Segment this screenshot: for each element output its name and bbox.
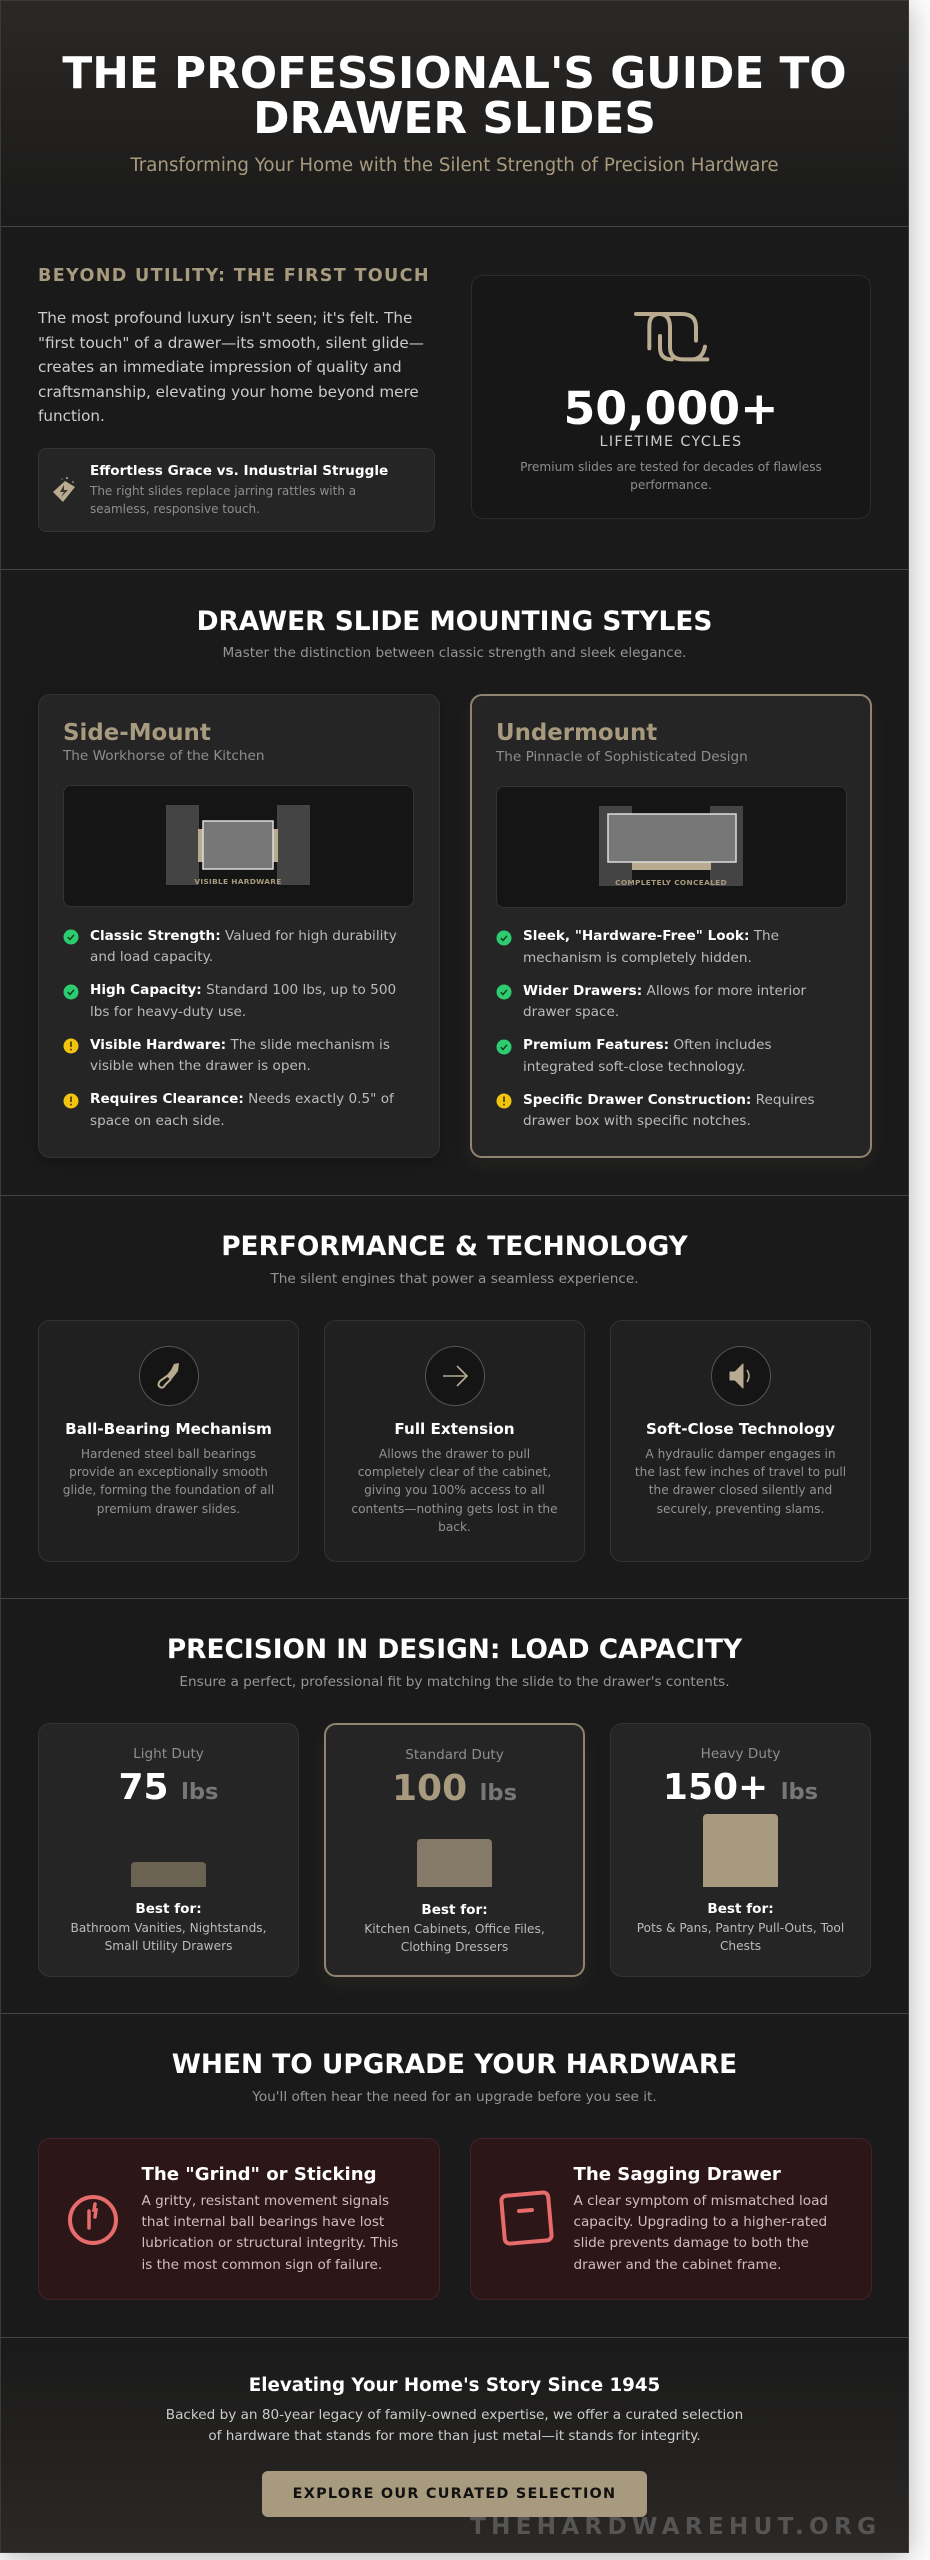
capacity bar [417,1839,492,1887]
subheading: Ensure a perfect, professional fit by matching the slide to the drawer's contents. [179,1674,730,1690]
list item: specific construction: drawer box with specific notches. [523,1113,751,1129]
body text: The most profound luxury isn't seen; it's felt. The [38,309,412,327]
card: soft close [610,1320,871,1562]
card text: giving you 100% access to all [364,1483,545,1497]
list item: wider drawers: Wider Drawers: Allows for more interior [523,982,806,998]
stat description [520,460,822,492]
callout text: The right slides replace jarring rattles with a [90,484,356,498]
panel: beyond utility [0,227,909,570]
card: light duty [38,1723,299,1977]
alert text: slide prevents damage to both the [574,2235,809,2251]
card title: Undermount [496,720,657,746]
best for label: Best for: [135,1901,202,1917]
list item: high capacity: High Capacity: Standard 100 lbs, up to 500 [90,982,396,998]
list item: specific construction: Specific Drawer Construction: Requires [523,1092,815,1108]
diagram: undermount: COMPLETELY CONCEALED [615,878,727,887]
card subtitle: The Pinnacle of Sophisticated Design [496,749,748,765]
card: full extension [324,1320,585,1562]
best for label: Best for: [421,1902,488,1918]
card: side-mount [38,694,440,1158]
list item: sleek look [496,928,779,966]
card text: A hydraulic damper engages in [645,1447,836,1461]
panel: when to upgrade [0,2014,909,2338]
stat description: performance. [630,478,712,492]
list item: requires clearance: Requires Clearance: Needs exactly 0.5" of [90,1091,394,1107]
alert text: A clear symptom of mismatched load [574,2193,828,2209]
best for text: Clothing Dressers [401,1940,508,1954]
best for text: Chests [720,1939,761,1953]
body text: craftsmanship, elevating your home beyond mere [38,383,419,401]
footer text: of hardware that stands for more than just metal—it stands for integrity. [208,2428,701,2444]
title: DRAWER SLIDES [253,93,656,144]
watermark: THEHARDWAREHUT.ORG [470,2513,881,2540]
heading: PERFORMANCE & TECHNOLOGY [221,1231,688,1262]
icon: bolt [53,476,75,502]
card subtitle: The Workhorse of the Kitchen [63,748,264,764]
card: undermount [470,694,872,1158]
callout: effortless grace [38,448,435,532]
diagram: undermount [496,786,847,908]
tier name: Heavy Duty [701,1746,780,1762]
card text: securely, preventing slams. [657,1502,824,1516]
callout text: seamless, responsive touch. [90,502,260,516]
alert text: that internal ball bearings have lost [142,2214,384,2230]
alert text: A gritty, resistant movement signals [142,2193,389,2209]
icon: speaker [711,1346,771,1406]
alert text [574,2193,828,2273]
body text: "first touch" of a drawer—its smooth, silent glide— [38,334,424,352]
alert text: lubrication or structural integrity. This [142,2235,398,2251]
list item: premium features: integrated soft-close technology. [523,1059,746,1075]
best for text: Kitchen Cabinets, Office Files, [364,1922,545,1936]
list item: classic strength: and load capacity. [90,949,213,965]
card text: completely clear of the cabinet, [358,1465,551,1479]
alert card: sagging [470,2138,872,2300]
card text: back. [438,1520,471,1534]
list item: specific construction [496,1092,815,1129]
stat number: 50,000+ [563,381,779,435]
capacity value: 150+ lbs [663,1767,818,1808]
best for text [637,1921,844,1953]
list item: high capacity [64,982,396,1020]
card text: premium drawer slides. [97,1502,240,1516]
icon: slide rails [634,312,710,362]
panel: load capacity [0,1599,909,2014]
stat description: Premium slides are tested for decades of flawless [520,460,822,474]
card text [635,1447,846,1516]
body text [38,309,424,425]
card text: Allows the drawer to pull [379,1447,530,1461]
card text: provide an exceptionally smooth [69,1465,268,1479]
panel: performance and technology [0,1196,909,1599]
list item: classic strength: Classic Strength: Valued for high durability [90,928,397,944]
icon: ball bearing [139,1346,199,1406]
callout title: Effortless Grace vs. Industrial Struggle [90,463,388,479]
list item: requires clearance: space on each side. [90,1113,225,1129]
best for label: Best for: [707,1901,774,1917]
alert text: drawer and the cabinet frame. [574,2257,781,2273]
card: heavy duty [610,1723,871,1977]
capacity value: 75 lbs [118,1767,218,1808]
callout text [90,484,356,516]
title [62,48,847,144]
call to action button: EXPLORE OUR CURATED SELECTION [293,2486,616,2502]
best for text: Small Utility Drawers [105,1939,232,1953]
card text: Hardened steel ball bearings [81,1447,256,1461]
heading: WHEN TO UPGRADE YOUR HARDWARE [172,2048,737,2080]
footer heading: Elevating Your Home's Story Since 1945 [249,2375,660,2396]
title: THE PROFESSIONAL'S GUIDE TO [62,48,847,99]
list item: premium features [496,1037,772,1075]
card title: Full Extension [394,1420,515,1438]
body text: creates an immediate impression of quality and [38,358,402,376]
capacity bar [131,1862,206,1887]
stat card [471,275,871,519]
stat label: LIFETIME CYCLES [599,434,743,450]
diagram: side mount: VISIBLE HARDWARE [194,877,282,886]
card text: glide, forming the foundation of all [63,1483,274,1497]
diagram: side mount [63,785,414,907]
list item: visible hardware: Visible Hardware: The slide mechanism is [90,1036,390,1052]
alert title: The "Grind" or Sticking [142,2164,377,2184]
best for text: Pots & Pans, Pantry Pull-Outs, Tool [637,1921,844,1935]
list item: sleek look: mechanism is completely hidden. [523,950,752,966]
alert title: The Sagging Drawer [574,2164,781,2184]
card: standard duty [324,1723,585,1977]
list item: sleek look: Sleek, "Hardware-Free" Look: The [523,928,779,944]
list item: wider drawers: drawer space. [523,1004,619,1020]
list item: high capacity: lbs for heavy-duty use. [90,1004,246,1020]
card title: Side-Mount [63,720,211,746]
footer text: Backed by an 80-year legacy of family-owned expertise, we offer a curated selection [166,2406,743,2422]
subheading: You'll often hear the need for an upgrade before you see it. [252,2089,657,2105]
capacity value: 100 lbs [392,1768,517,1809]
card text [351,1447,558,1534]
subtitle: Transforming Your Home with the Silent Strength of Precision Hardware [130,155,779,176]
icon: arrow [425,1346,485,1406]
list item: visible hardware [64,1036,390,1074]
list item: wider drawers [496,982,806,1020]
card: ball bearing [38,1320,299,1562]
card text [63,1447,274,1516]
alert text [142,2193,398,2273]
card text: the drawer closed silently and [649,1483,832,1497]
footer text [166,2406,743,2444]
heading: DRAWER SLIDE MOUNTING STYLES [197,606,712,636]
header panel [0,0,909,227]
best for text [70,1921,266,1953]
subheading: The silent engines that power a seamless experience. [270,1271,639,1287]
subheading: Master the distinction between classic strength and sleek elegance. [223,645,686,661]
capacity bar [703,1814,778,1887]
tier name: Light Duty [133,1746,204,1762]
alert card: grind [38,2138,440,2300]
list item: requires clearance [64,1091,394,1129]
panel: mounting styles [0,570,909,1196]
card text: contents—nothing gets lost in the [351,1502,558,1516]
icon: gauge [68,2195,118,2245]
body text: function. [38,407,105,425]
best for text [364,1922,545,1954]
alert text: is the most common sign of failure. [142,2257,382,2273]
call to action button [262,2471,647,2517]
list item: visible hardware: visible when the drawer is open. [90,1058,311,1074]
heading: PRECISION IN DESIGN: LOAD CAPACITY [167,1634,742,1665]
heading: BEYOND UTILITY: THE FIRST TOUCH [38,266,430,286]
list item: classic strength [64,928,397,965]
list item: premium features: Premium Features: Often includes [523,1037,772,1053]
best for text: Bathroom Vanities, Nightstands, [70,1921,266,1935]
footer panel [0,2338,909,2553]
card text: the last few inches of travel to pull [635,1465,846,1479]
card title: Ball-Bearing Mechanism [65,1420,272,1438]
tier name: Standard Duty [405,1747,504,1763]
alert text: capacity. Upgrading to a higher-rated [574,2214,827,2230]
card title: Soft-Close Technology [646,1420,835,1438]
icon: sagging drawer [499,2190,554,2246]
